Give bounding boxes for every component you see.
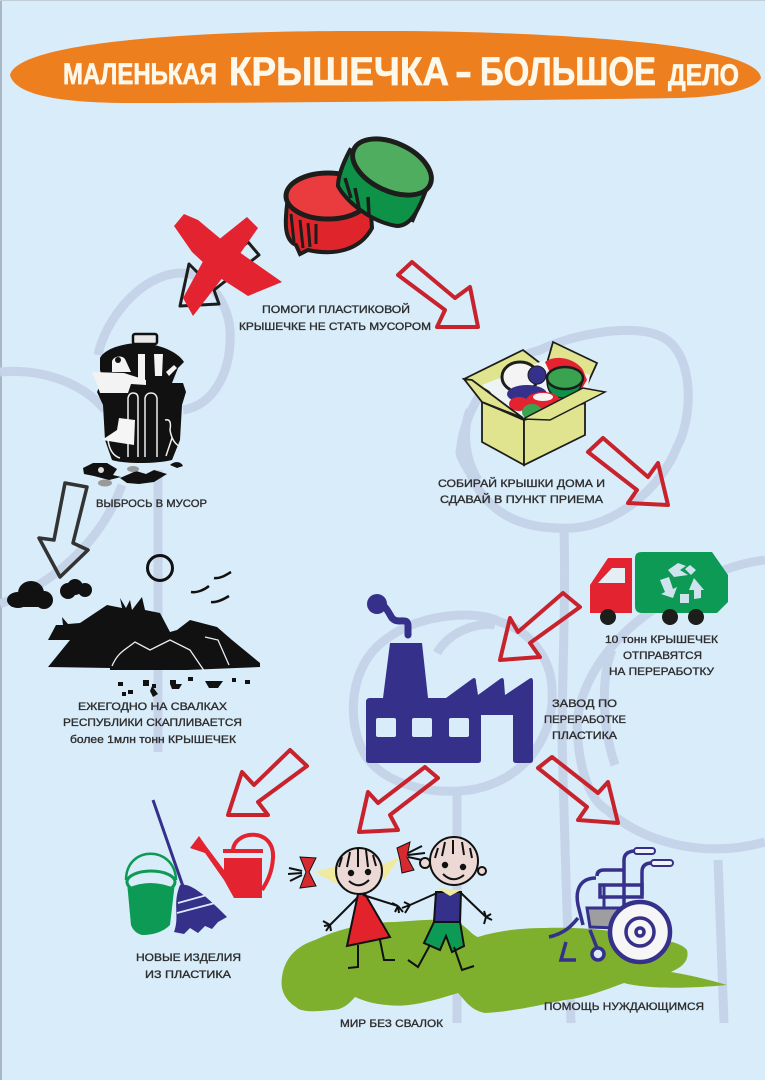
caption: factory: ПЛАСТИКА — [552, 730, 618, 742]
caption: collect caps: СДАВАЙ В ПУНКТ ПРИЕМА — [440, 493, 604, 506]
caption: help the cap: ПОМОГИ ПЛАСТИКОВОЙ — [262, 303, 410, 316]
caption: landfill: более 1млн тонн КРЫШЕЧЕК — [70, 734, 237, 746]
icon: collection box — [464, 342, 605, 465]
caption: truck: 10 тонн КРЫШЕЧЕК — [605, 634, 719, 646]
icon: dark clouds — [7, 579, 92, 609]
caption: new products: НОВЫЕ ИЗДЕЛИЯ — [136, 952, 241, 964]
caption: help the cap: КРЫШЕЧКЕ НЕ СТАТЬ МУСОРОМ — [239, 321, 431, 333]
caption: landfill — [63, 701, 242, 746]
arrow: box to truck — [588, 438, 668, 505]
caption: new products: ИЗ ПЛАСТИКА — [145, 969, 232, 981]
arrow: factory to new products — [228, 750, 307, 815]
title banner: ДЕЛО — [668, 59, 739, 92]
bucket — [127, 882, 175, 935]
icon: recycling truck — [590, 552, 728, 625]
arrow: trash to landfill — [39, 483, 88, 577]
caption: collect caps — [438, 477, 605, 506]
caption: help for those in need: ПОМОЩЬ НУЖДАЮЩИМСЯ — [544, 1001, 704, 1013]
icon: landfill — [7, 556, 260, 697]
title banner: МАЛЕНЬКАЯ — [63, 58, 217, 91]
caption: truck — [605, 634, 719, 678]
caption: new products — [136, 952, 241, 981]
icon: trash can — [83, 334, 186, 486]
icon: children — [288, 837, 492, 970]
caption: landfill: РЕСПУБЛИКИ СКАПЛИВАЕТСЯ — [63, 717, 242, 729]
caption: factory: ЗАВОД ПО — [552, 698, 617, 710]
girl — [288, 842, 425, 968]
caption: help the cap — [239, 303, 431, 333]
caption: throw in trash: ВЫБРОСЬ В МУСОР — [96, 498, 207, 510]
boy — [402, 837, 492, 970]
icon: plastic caps — [286, 127, 440, 254]
arrow: factory to wheelchair — [538, 757, 618, 823]
arrow: factory to children — [359, 767, 438, 832]
debris dots — [118, 677, 250, 697]
icon: wheelchair — [549, 848, 673, 962]
icon: bucket, broom and watering can — [126, 800, 273, 935]
watering can — [190, 836, 262, 898]
caption: collect caps: СОБИРАЙ КРЫШКИ ДОМА И — [438, 477, 605, 490]
title banner: БОЛЬШОЕ — [480, 50, 656, 94]
icon: birds — [191, 572, 231, 602]
icon: crossed-out arrow — [174, 214, 282, 316]
caption: truck: ОТПРАВЯТСЯ — [623, 650, 702, 662]
caption: factory: ПЕРЕРАБОТКЕ — [544, 714, 626, 726]
caption: factory — [544, 698, 626, 742]
title banner: - — [455, 50, 472, 94]
arrow: truck to factory — [500, 593, 580, 660]
green meadow — [282, 920, 727, 1013]
title banner: КРЫШЕЧКА — [229, 50, 449, 94]
broom — [153, 800, 186, 895]
caption: landfill: ЕЖЕГОДНО НА СВАЛКАХ — [78, 701, 228, 713]
caption: truck: НА ПЕРЕРАБОТКУ — [609, 666, 715, 678]
title banner — [10, 31, 761, 103]
icon: factory — [366, 594, 533, 763]
icon: sun ring — [148, 556, 172, 580]
arrow: caps to box — [398, 262, 478, 327]
garbage mound — [48, 597, 260, 670]
caption: world without landfills: МИР БЕЗ СВАЛОК — [340, 1018, 444, 1030]
